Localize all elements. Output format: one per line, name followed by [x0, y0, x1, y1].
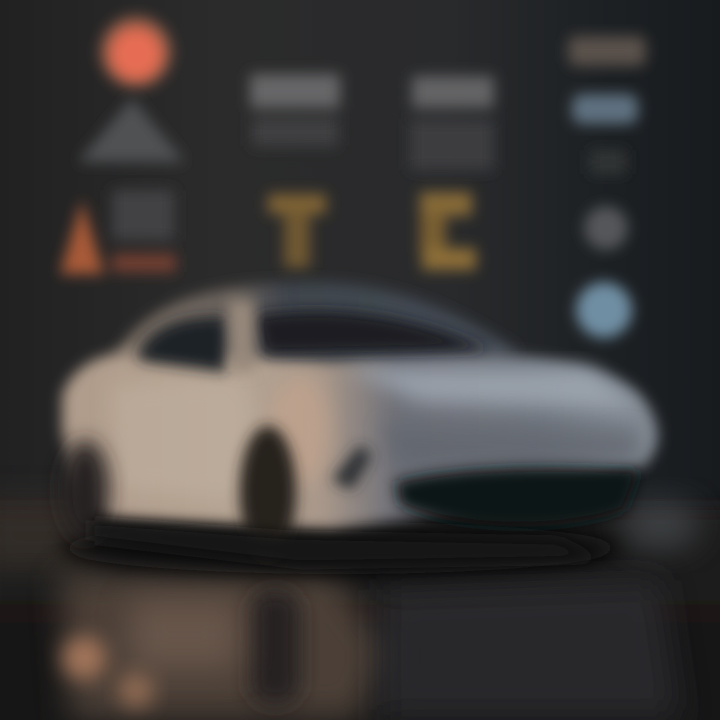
icon: faint middle	[590, 150, 626, 174]
car fender highlight	[270, 375, 330, 485]
car side window	[136, 318, 226, 372]
car shadow	[60, 522, 620, 574]
car body	[62, 350, 658, 530]
car bumper shadow	[90, 520, 600, 565]
icon: grey circle	[584, 206, 628, 250]
car reflection	[60, 501, 700, 720]
block: centre right grey panel	[410, 76, 494, 170]
icon: blue circle	[576, 282, 632, 338]
car hood shade	[380, 425, 640, 470]
icon: red circle	[100, 16, 172, 88]
car grille	[395, 467, 640, 526]
icon: top pill	[568, 36, 646, 66]
block: left lower icons	[60, 190, 176, 274]
column: right icons	[568, 36, 646, 338]
icon: amber symbol right	[420, 192, 476, 270]
icon: amber symbol left	[268, 194, 326, 268]
car front wheel	[240, 426, 296, 558]
car windshield	[255, 311, 490, 354]
icon: grey triangle	[78, 98, 185, 162]
car roof	[115, 282, 520, 400]
car side panel highlight	[110, 375, 255, 500]
car headlight	[332, 445, 372, 490]
car rear wheel	[61, 440, 109, 540]
block: centre left grey panel	[250, 74, 340, 146]
car pillar	[228, 300, 254, 372]
icon: blue pill	[572, 94, 638, 124]
car	[60, 282, 658, 574]
car hood highlight	[345, 368, 640, 410]
